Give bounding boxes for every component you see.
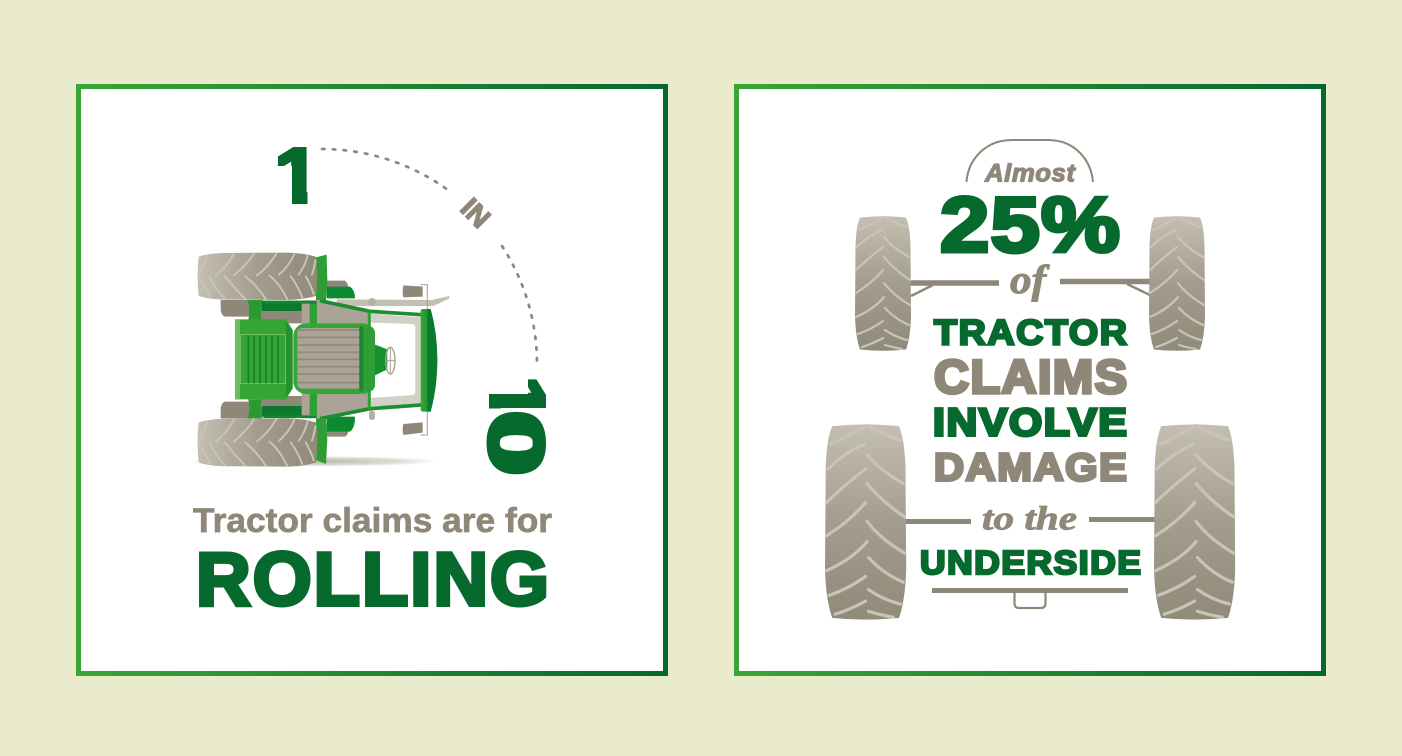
fenders	[316, 255, 327, 464]
caption: Tractor claims are for	[193, 502, 552, 540]
text: INVOLVE: INVOLVE	[933, 402, 1128, 444]
rear tyres	[825, 424, 1235, 620]
text: TRACTOR: TRACTOR	[934, 313, 1128, 353]
number: 10 rotated	[486, 379, 546, 474]
frame	[263, 301, 422, 419]
front axle	[908, 282, 1152, 296]
number: 1: 1	[274, 133, 319, 219]
text: DAMAGE: DAMAGE	[934, 446, 1128, 490]
tyres	[198, 253, 317, 300]
number: 25%: 25%	[940, 180, 1121, 268]
rear bar	[421, 309, 437, 412]
text: to the: to the	[982, 500, 1077, 538]
text: CLAIMS: CLAIMS	[934, 350, 1128, 403]
tractor illustration	[188, 253, 449, 467]
panel: underside claims	[736, 86, 1324, 674]
panel: rolling claims	[78, 86, 666, 674]
word: IN: IN	[455, 192, 496, 234]
text: Almost: Almost	[984, 160, 1077, 188]
exhaust and mirrors	[337, 296, 449, 306]
headline: ROLLING: ROLLING	[196, 537, 551, 621]
front tyres	[855, 216, 1205, 351]
text: of: of	[1010, 257, 1050, 302]
engine bonnet	[293, 323, 375, 394]
text: UNDERSIDE: UNDERSIDE	[920, 545, 1142, 582]
arch	[966, 140, 1093, 182]
radiator block	[235, 319, 293, 399]
rear axle	[903, 520, 1157, 522]
number: 10 rotated: 1	[474, 376, 560, 421]
number: 10 rotated: 0	[473, 411, 559, 475]
cab floor	[371, 313, 421, 407]
dotted arc	[322, 149, 537, 365]
hitch bar	[932, 590, 1128, 608]
dash and steering wheel	[375, 345, 387, 375]
